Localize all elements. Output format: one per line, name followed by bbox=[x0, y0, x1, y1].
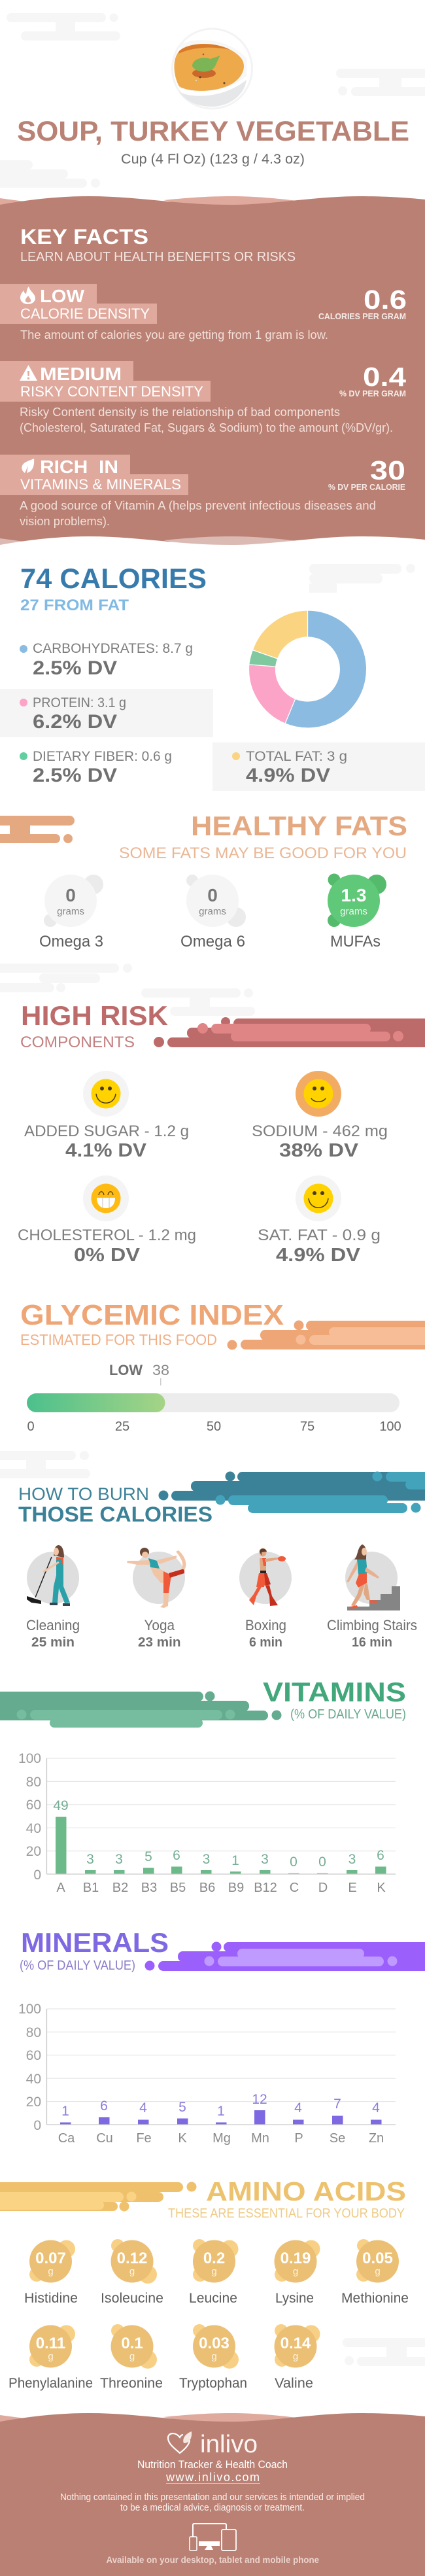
bar chart: vitamins: A bbox=[56, 1881, 65, 1895]
heading: glycemic index: GLYCEMIC INDEX bbox=[20, 1299, 284, 1331]
logo: wordmark: inlivo bbox=[200, 2431, 258, 2458]
activity: yoga bbox=[127, 1548, 186, 1608]
amino: isoleucine bbox=[101, 2239, 163, 2306]
value: cleaning minutes: 25 min bbox=[31, 1635, 75, 1650]
amino: lysine: g bbox=[293, 2266, 298, 2277]
amino: tryptophan: g bbox=[211, 2351, 217, 2362]
bar chart: vitamins: 100 bbox=[18, 1751, 41, 1766]
gauge scale bbox=[27, 1419, 401, 1434]
panel: key facts bbox=[0, 196, 425, 556]
fact: medium risky content density bbox=[0, 361, 406, 434]
component: cholesterol: 0% DV bbox=[74, 1245, 141, 1266]
description: Risky Content density is the relationship of bad components bbox=[20, 406, 340, 419]
amino: tryptophan: Tryptophan bbox=[179, 2376, 247, 2391]
description bbox=[20, 406, 393, 434]
value: 30: 30 bbox=[370, 455, 405, 485]
bar chart: minerals: K bbox=[178, 2131, 187, 2146]
nutrient: carbohydrates bbox=[20, 641, 193, 679]
bar chart: vitamins: 3 bbox=[203, 1852, 210, 1867]
fat: omega 6: 0 bbox=[207, 885, 218, 905]
panel: glycemic index bbox=[20, 1299, 425, 1434]
bar chart: vitamins: K bbox=[377, 1881, 386, 1895]
bar chart: minerals: Fe bbox=[136, 2131, 152, 2146]
decoration: orange stripes bbox=[0, 816, 75, 843]
heading: amino acids: AMINO ACIDS bbox=[206, 2176, 406, 2206]
subheading: 27 from fat: 27 FROM FAT bbox=[20, 597, 129, 614]
gauge scale: 0 bbox=[27, 1419, 35, 1434]
fat: omega 3: 0 bbox=[65, 885, 76, 905]
nutrient: dietary fiber: DIETARY FIBER: 0.6 g bbox=[33, 749, 172, 764]
component: sodium: 38% DV bbox=[279, 1140, 359, 1161]
serving size: Cup (4 Fl Oz) (123 g / 4.3 oz) bbox=[121, 152, 305, 167]
subheading: SOME FATS MAY BE GOOD FOR YOU bbox=[119, 844, 407, 862]
unit: % dv per gram: % DV PER GRAM bbox=[339, 389, 406, 398]
label: medium: MEDIUM bbox=[40, 364, 122, 384]
heading: 74 calories: 74 CALORIES bbox=[20, 563, 207, 595]
panel: minerals bbox=[18, 1927, 425, 2146]
bar chart: minerals: 6 bbox=[100, 2098, 108, 2114]
amino: valine bbox=[275, 2324, 320, 2391]
bar chart: vitamins: 3 bbox=[115, 1852, 123, 1867]
amino: leucine: g bbox=[211, 2266, 217, 2277]
panel: amino acids bbox=[0, 2176, 409, 2391]
bar chart: vitamins: B5 bbox=[170, 1881, 186, 1895]
gauge label: LOW bbox=[109, 1362, 143, 1378]
heading: those calories: THOSE CALORIES bbox=[18, 1503, 212, 1526]
heading: vitamins: VITAMINS bbox=[263, 1677, 406, 1707]
value: boxing minutes: 6 min bbox=[249, 1635, 282, 1650]
fat: omega 3: Omega 3 bbox=[39, 933, 103, 950]
gauge scale: 25 bbox=[115, 1419, 129, 1434]
fact: low calorie density bbox=[0, 284, 407, 341]
bar chart: vitamins: 20 bbox=[26, 1844, 41, 1859]
nutrient: total fat: 4.9% DV bbox=[246, 765, 330, 786]
bar chart: minerals: 20 bbox=[26, 2095, 41, 2110]
value: 0.6: 0.6 bbox=[364, 285, 407, 315]
bar chart: vitamins: B6 bbox=[199, 1881, 215, 1895]
subheading: key facts: LEARN ABOUT HEALTH BENEFITS OR RISKS bbox=[20, 250, 296, 264]
unit: % dv per calorie: % DV PER CALORIE bbox=[328, 482, 405, 492]
panel: footer bbox=[0, 2413, 425, 2576]
activity: boxing bbox=[239, 1548, 292, 1606]
fat: omega 6 bbox=[180, 875, 246, 950]
label: rich in: RICH IN bbox=[40, 457, 118, 477]
bar chart: vitamins: 6 bbox=[377, 1848, 384, 1863]
component: saturated fat bbox=[258, 1175, 381, 1266]
description: vision problems). bbox=[20, 515, 110, 528]
amino: threonine bbox=[100, 2324, 163, 2391]
bar chart: vitamins: 40 bbox=[26, 1821, 41, 1836]
fact: rich in vitamins and minerals bbox=[0, 455, 405, 528]
amino: threonine: 0.1 bbox=[121, 2335, 143, 2352]
nutrient: dietary fiber bbox=[20, 749, 172, 786]
bar chart: minerals: 5 bbox=[178, 2100, 186, 2115]
bar chart: vitamins: E bbox=[348, 1881, 357, 1895]
nutrient: protein: 6.2% DV bbox=[33, 711, 117, 733]
gauge label: 38 bbox=[152, 1362, 169, 1378]
amino: methionine: Methionine bbox=[341, 2291, 409, 2306]
decoration: red stripes bbox=[154, 1017, 425, 1047]
bar chart: vitamins: B9 bbox=[228, 1881, 244, 1895]
fat: mufas: 1.3 bbox=[341, 885, 366, 905]
amino: isoleucine: 0.12 bbox=[117, 2250, 147, 2267]
amino: valine: Valine bbox=[275, 2376, 313, 2391]
value: 0.4: 0.4 bbox=[363, 362, 406, 392]
bar chart: minerals: 1 bbox=[61, 2104, 69, 2119]
activity: climbing stairs bbox=[345, 1544, 400, 1610]
bar chart: vitamins: 0 bbox=[290, 1854, 298, 1870]
bar chart: minerals: P bbox=[294, 2131, 303, 2146]
bar chart: minerals: 4 bbox=[139, 2100, 147, 2115]
bar chart: minerals: Zn bbox=[369, 2131, 384, 2146]
description: The amount of calories you are getting from 1 gram is low. bbox=[20, 328, 328, 341]
value: climbing minutes: 16 min bbox=[352, 1635, 392, 1650]
bar chart: vitamins: 3 bbox=[348, 1852, 356, 1867]
heading: healthy fats: HEALTHY FATS bbox=[191, 810, 407, 841]
label: climbing stairs: Climbing Stairs bbox=[327, 1617, 417, 1633]
component: added sugar: ADDED SUGAR - 1.2 g bbox=[24, 1123, 189, 1140]
activity: cleaning bbox=[27, 1545, 79, 1606]
fat: mufas bbox=[328, 874, 386, 950]
nutrient: carbohydrates: CARBOHYDRATES: 8.7 g bbox=[33, 641, 193, 656]
fat: omega 3: grams bbox=[57, 906, 84, 917]
bar chart: minerals: Mg bbox=[212, 2131, 231, 2146]
bar chart: vitamins: 80 bbox=[26, 1775, 41, 1790]
amino: valine: g bbox=[293, 2351, 298, 2362]
panel: healthy fats bbox=[0, 810, 407, 950]
gauge scale: 100 bbox=[379, 1419, 401, 1434]
fat: omega 6: Omega 6 bbox=[180, 933, 245, 950]
bar chart: vitamins: B2 bbox=[112, 1881, 128, 1895]
icon: soup bowl bbox=[173, 29, 252, 109]
heading: key facts: KEY FACTS bbox=[20, 225, 148, 249]
label: risky content density: RISKY CONTENT DENSITY bbox=[20, 383, 203, 400]
amino: methionine bbox=[341, 2239, 409, 2306]
label: boxing: Boxing bbox=[245, 1617, 286, 1633]
gauge bar bbox=[27, 1393, 400, 1412]
bar chart: vitamins: 5 bbox=[144, 1849, 152, 1864]
decoration: green stripes bbox=[0, 1692, 281, 1728]
subheading: THESE ARE ESSENTIAL FOR YOUR BODY bbox=[168, 2206, 405, 2221]
bar chart: minerals: 1 bbox=[217, 2104, 225, 2119]
bar chart: minerals: Cu bbox=[96, 2131, 113, 2146]
bar chart: minerals: 60 bbox=[26, 2048, 41, 2063]
label: vitamins and minerals: VITAMINS & MINERALS bbox=[20, 476, 181, 493]
decoration: purple stripes bbox=[145, 1941, 425, 1971]
bar chart: minerals: 0 bbox=[33, 2118, 41, 2133]
bar chart: vitamins: 6 bbox=[173, 1848, 180, 1863]
bar chart: vitamins: D bbox=[318, 1881, 328, 1895]
value: yoga minutes: 23 min bbox=[138, 1635, 180, 1650]
website link: www.inlivo.com bbox=[165, 2471, 260, 2484]
amino: lysine bbox=[275, 2240, 320, 2306]
gauge scale: 50 bbox=[207, 1419, 221, 1434]
amino: phenylalanine: g bbox=[48, 2351, 54, 2362]
tagline: Nutrition Tracker & Health Coach bbox=[137, 2458, 288, 2471]
nutrient: protein: PROTEIN: 3.1 g bbox=[33, 695, 126, 710]
availability note: Available on your desktop, tablet and mobile phone bbox=[106, 2554, 319, 2565]
heading: minerals: MINERALS bbox=[21, 1927, 169, 1958]
bar chart: minerals: 12 bbox=[252, 2092, 267, 2107]
amino: histidine: 0.07 bbox=[35, 2250, 66, 2267]
label: yoga: Yoga bbox=[144, 1617, 175, 1633]
bar chart: vitamins: 0 bbox=[318, 1854, 326, 1870]
logo: heart and leaf bbox=[168, 2431, 192, 2453]
amino: methionine: g bbox=[375, 2266, 381, 2277]
amino: threonine: g bbox=[129, 2351, 135, 2362]
bar chart: vitamins: 3 bbox=[86, 1852, 94, 1867]
label: low: LOW bbox=[40, 286, 85, 306]
icon: devices bbox=[190, 2524, 236, 2550]
amino: lysine: Lysine bbox=[275, 2291, 314, 2306]
amino: methionine: 0.05 bbox=[362, 2250, 393, 2267]
panel: calories bbox=[0, 563, 425, 791]
bar chart: minerals: Ca bbox=[58, 2131, 75, 2146]
nutrient: dietary fiber: 2.5% DV bbox=[33, 765, 117, 786]
icon: flame bbox=[20, 287, 35, 304]
amino: leucine: 0.2 bbox=[203, 2250, 225, 2267]
label: cleaning: Cleaning bbox=[26, 1617, 80, 1633]
component: added sugar bbox=[24, 1071, 189, 1161]
decoration: teal stripes bbox=[158, 1472, 425, 1513]
description: (Cholesterol, Saturated Fat, Sugars & Sodium) to the amount (%DV/gr). bbox=[20, 421, 393, 434]
disclaimer: to be a medical advice, diagnosis or treatment. bbox=[120, 2503, 305, 2513]
bar chart: minerals: 7 bbox=[333, 2097, 341, 2112]
bar chart: vitamins: 1 bbox=[231, 1853, 239, 1868]
subheading: components: COMPONENTS bbox=[20, 1034, 135, 1051]
bar chart: minerals: 100 bbox=[18, 2002, 41, 2017]
decoration: yellow stripes bbox=[0, 2182, 196, 2211]
bar chart: minerals: Mn bbox=[251, 2131, 269, 2146]
icon: warning triangle bbox=[20, 365, 37, 381]
unit: calories per gram: CALORIES PER GRAM bbox=[318, 311, 406, 321]
amino: histidine: g bbox=[48, 2266, 54, 2277]
component: saturated fat: SAT. FAT - 0.9 g bbox=[258, 1227, 381, 1244]
fat: omega 6: grams bbox=[199, 906, 226, 917]
amino: phenylalanine: 0.11 bbox=[36, 2335, 65, 2352]
bar chart: vitamins: B3 bbox=[141, 1881, 157, 1895]
panel: vitamins bbox=[0, 1677, 406, 1895]
amino: isoleucine: g bbox=[129, 2266, 135, 2277]
nutrient: carbohydrates: 2.5% DV bbox=[33, 657, 117, 679]
bar chart: vitamins: B1 bbox=[83, 1881, 99, 1895]
amino: leucine bbox=[189, 2239, 238, 2306]
bar chart: minerals: 40 bbox=[26, 2072, 41, 2087]
bar chart: minerals: 80 bbox=[26, 2025, 41, 2040]
component: added sugar: 4.1% DV bbox=[65, 1140, 147, 1161]
donut chart bbox=[249, 610, 367, 728]
label: calorie density: CALORIE DENSITY bbox=[20, 305, 150, 322]
bar chart: vitamins: B12 bbox=[254, 1881, 277, 1895]
bar chart: vitamins: 49 bbox=[53, 1798, 69, 1813]
component: cholesterol: CHOLESTEROL - 1.2 mg bbox=[18, 1227, 196, 1244]
bar chart: vitamins bbox=[18, 1751, 396, 1895]
amino: histidine bbox=[24, 2240, 78, 2306]
amino: tryptophan bbox=[179, 2324, 247, 2391]
amino: threonine: Threonine bbox=[100, 2376, 163, 2391]
amino: tryptophan: 0.03 bbox=[199, 2335, 230, 2352]
fat: mufas: MUFAs bbox=[330, 933, 381, 950]
fat: mufas: grams bbox=[340, 906, 367, 917]
component: cholesterol bbox=[18, 1175, 196, 1266]
nutrient: protein bbox=[20, 695, 126, 733]
bar chart: minerals bbox=[18, 2002, 396, 2146]
amino: histidine: Histidine bbox=[24, 2291, 78, 2306]
bar chart: minerals: 4 bbox=[294, 2100, 302, 2115]
bar chart: vitamins: 60 bbox=[26, 1798, 41, 1813]
description: A good source of Vitamin A (helps prevent infectious diseases and bbox=[20, 499, 376, 512]
gauge label bbox=[109, 1362, 169, 1385]
component: sodium bbox=[252, 1071, 388, 1161]
nutrient: total fat bbox=[232, 749, 347, 786]
heading: high risk: HIGH RISK bbox=[21, 1000, 168, 1031]
bar chart: vitamins: 0 bbox=[33, 1868, 41, 1883]
amino: phenylalanine: Phenylalanine bbox=[8, 2376, 93, 2391]
title: SOUP, TURKEY VEGETABLE bbox=[17, 116, 409, 147]
panel: high risk components bbox=[18, 1000, 425, 1266]
panel: burn calories bbox=[18, 1472, 425, 1650]
bar chart: vitamins: C bbox=[290, 1881, 299, 1895]
amino: leucine: Leucine bbox=[189, 2291, 237, 2306]
subheading: (% OF DAILY VALUE) bbox=[20, 1958, 135, 1973]
component: sodium: SODIUM - 462 mg bbox=[252, 1123, 388, 1140]
subheading: (% OF DAILY VALUE) bbox=[290, 1707, 406, 1722]
amino: phenylalanine bbox=[8, 2325, 93, 2391]
icon: leaf bbox=[22, 459, 34, 473]
component: saturated fat: 4.9% DV bbox=[276, 1245, 361, 1266]
fat: omega 3 bbox=[39, 875, 103, 950]
heading: how to burn: HOW TO BURN bbox=[18, 1484, 149, 1504]
disclaimer bbox=[60, 2492, 365, 2513]
gauge scale: 75 bbox=[300, 1419, 314, 1434]
nutrient: total fat: TOTAL FAT: 3 g bbox=[246, 749, 347, 764]
bar chart: vitamins: 3 bbox=[261, 1852, 269, 1867]
bar chart: minerals: 4 bbox=[372, 2100, 380, 2115]
bar chart: minerals: Se bbox=[330, 2131, 345, 2146]
disclaimer: Nothing contained in this presentation and our services is intended or implied bbox=[60, 2492, 365, 2503]
amino: lysine: 0.19 bbox=[280, 2250, 311, 2267]
subheading: ESTIMATED FOR THIS FOOD bbox=[20, 1331, 217, 1348]
decoration: orange stripes bbox=[228, 1320, 425, 1350]
description bbox=[20, 499, 376, 528]
amino: isoleucine: Isoleucine bbox=[101, 2291, 163, 2306]
amino: valine: 0.14 bbox=[280, 2335, 311, 2352]
